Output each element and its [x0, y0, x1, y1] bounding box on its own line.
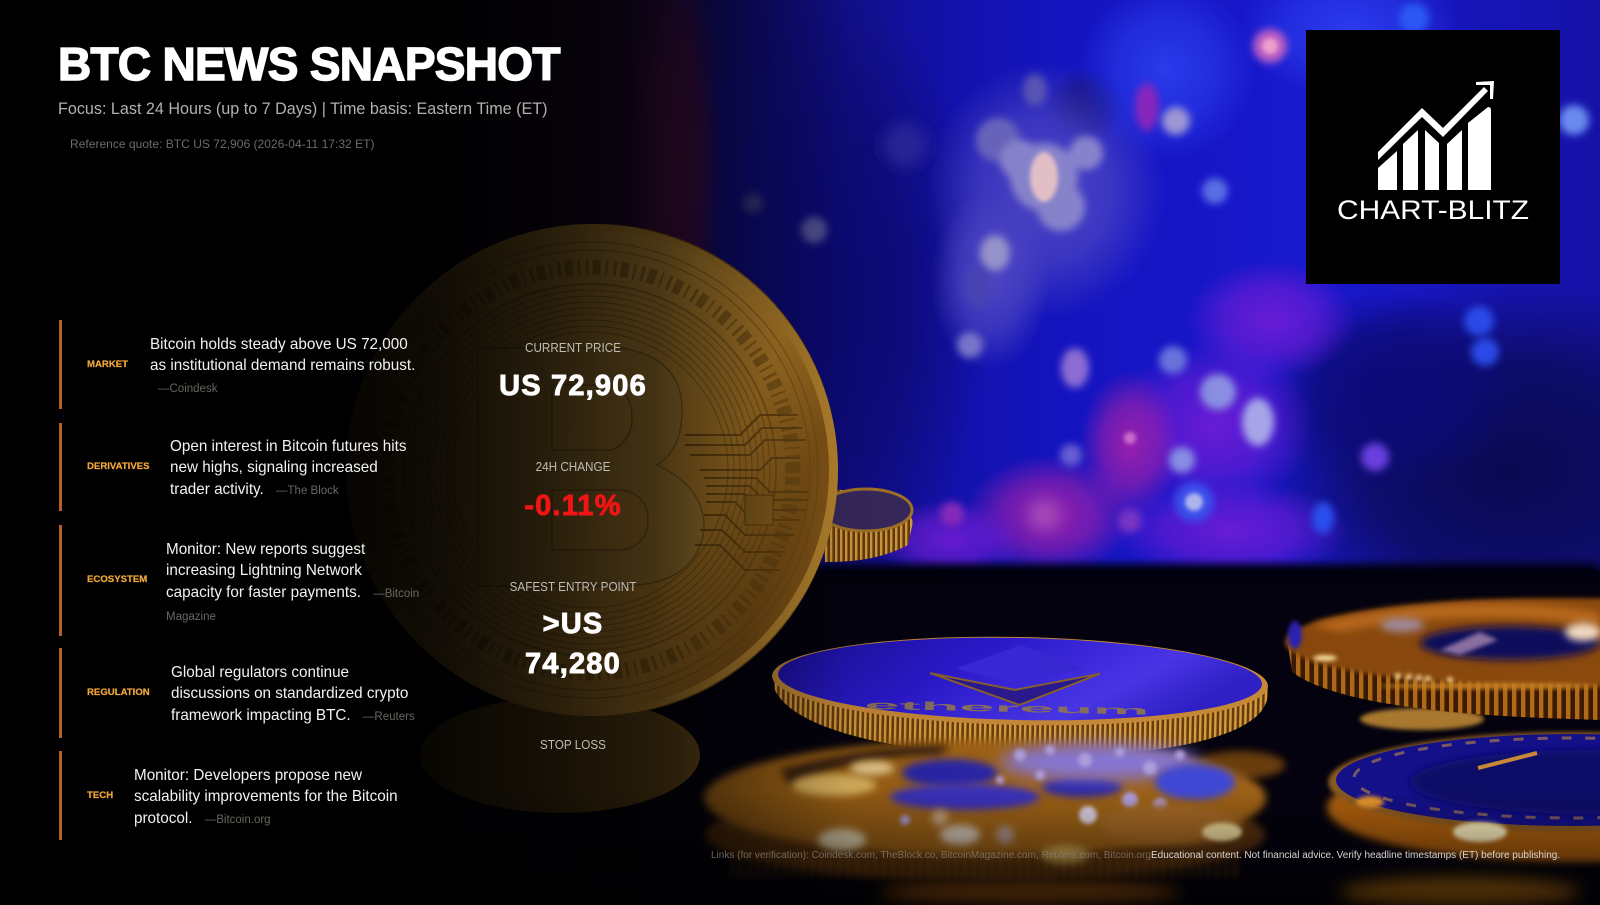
label: stop loss: STOP LOSS — [540, 737, 606, 752]
news item: ecosystem — [59, 525, 419, 636]
flat coin at bitcoin base — [420, 697, 700, 813]
news item: market — [59, 320, 415, 409]
reference quote: Reference quote: BTC US 72,906 (2026-04-11 17:32 ET) — [70, 137, 374, 151]
news item: tech: Monitor: Developers propose new — [134, 767, 362, 784]
table reflections — [880, 708, 1580, 905]
bitcoin coin — [346, 224, 838, 716]
ethereum coin — [770, 632, 1269, 761]
value: 24h change: -0.11% — [524, 490, 622, 522]
news item: derivatives: new highs, signaling increased — [170, 459, 378, 476]
label: safest entry point: SAFEST ENTRY POINT — [510, 579, 636, 594]
ethereum coin: ethereum — [864, 698, 1150, 717]
value: safest entry point: >US — [543, 608, 603, 640]
news item: ecosystem: Monitor: New reports suggest — [166, 541, 365, 558]
news item: regulation — [59, 648, 415, 738]
bokeh sky — [400, 0, 1600, 660]
dark table — [0, 570, 1600, 905]
news item: market: MARKET — [87, 359, 128, 370]
news item: derivatives: Open interest in Bitcoin futures hits — [170, 438, 406, 455]
news item: regulation: framework impacting BTC. —Reuters — [171, 707, 415, 724]
logo wordmark: CHART-BLITZ — [1337, 195, 1529, 225]
news item: regulation: Global regulators continue — [171, 664, 349, 681]
logo: Chart-Blitz — [1306, 30, 1560, 284]
news item: tech — [59, 751, 398, 840]
subtitle: Focus: Last 24 Hours (up to 7 Days) | Time basis: Eastern Time (ET) — [58, 100, 547, 118]
news item: derivatives — [59, 423, 406, 511]
news item: market: as institutional demand remains robust. — [150, 357, 415, 374]
value: current price: US 72,906 — [499, 370, 647, 402]
news item: tech: protocol. —Bitcoin.org — [134, 810, 271, 827]
news item: market: Bitcoin holds steady above US 72,000 — [150, 336, 408, 353]
news item: ecosystem: increasing Lightning Network — [166, 562, 362, 579]
news item: market: —Coindesk — [158, 383, 217, 395]
right bottom coin — [1327, 732, 1600, 862]
icon: rising bar chart with arrow — [1378, 81, 1494, 190]
small coin behind bitcoin — [820, 489, 913, 562]
news item: ecosystem: Magazine — [166, 611, 216, 623]
footer: links and disclaimer: Links (for verification): Coindesk.com, TheBlock.co, BitcoinMagazine.com, Reuters.com, Bitcoin.orgEducational content. Not financial advice. Verify headline timestamps (ET) before publishing. — [711, 850, 1560, 861]
news item: ecosystem: capacity for faster payments. —Bitcoin — [166, 584, 419, 601]
title: BTC NEWS SNAPSHOT — [58, 38, 560, 90]
news item: regulation: discussions on standardized crypto — [171, 685, 408, 702]
blurred foreground coin — [704, 740, 1266, 881]
panel: news items — [59, 320, 419, 840]
label: 24h change: 24H CHANGE — [536, 459, 610, 474]
news item: derivatives: DERIVATIVES — [87, 461, 150, 472]
value: safest entry point: 74,280 — [525, 648, 621, 680]
right top coin — [1285, 598, 1600, 720]
label: current price: CURRENT PRICE — [525, 340, 621, 355]
news item: tech: TECH — [87, 790, 113, 801]
news item: derivatives: trader activity. —The Block — [170, 481, 339, 498]
value: safest entry point — [525, 608, 621, 680]
news item: ecosystem: ECOSYSTEM — [87, 574, 147, 585]
news item: regulation: REGULATION — [87, 687, 150, 698]
news item: tech: scalability improvements for the Bitcoin — [134, 788, 398, 805]
